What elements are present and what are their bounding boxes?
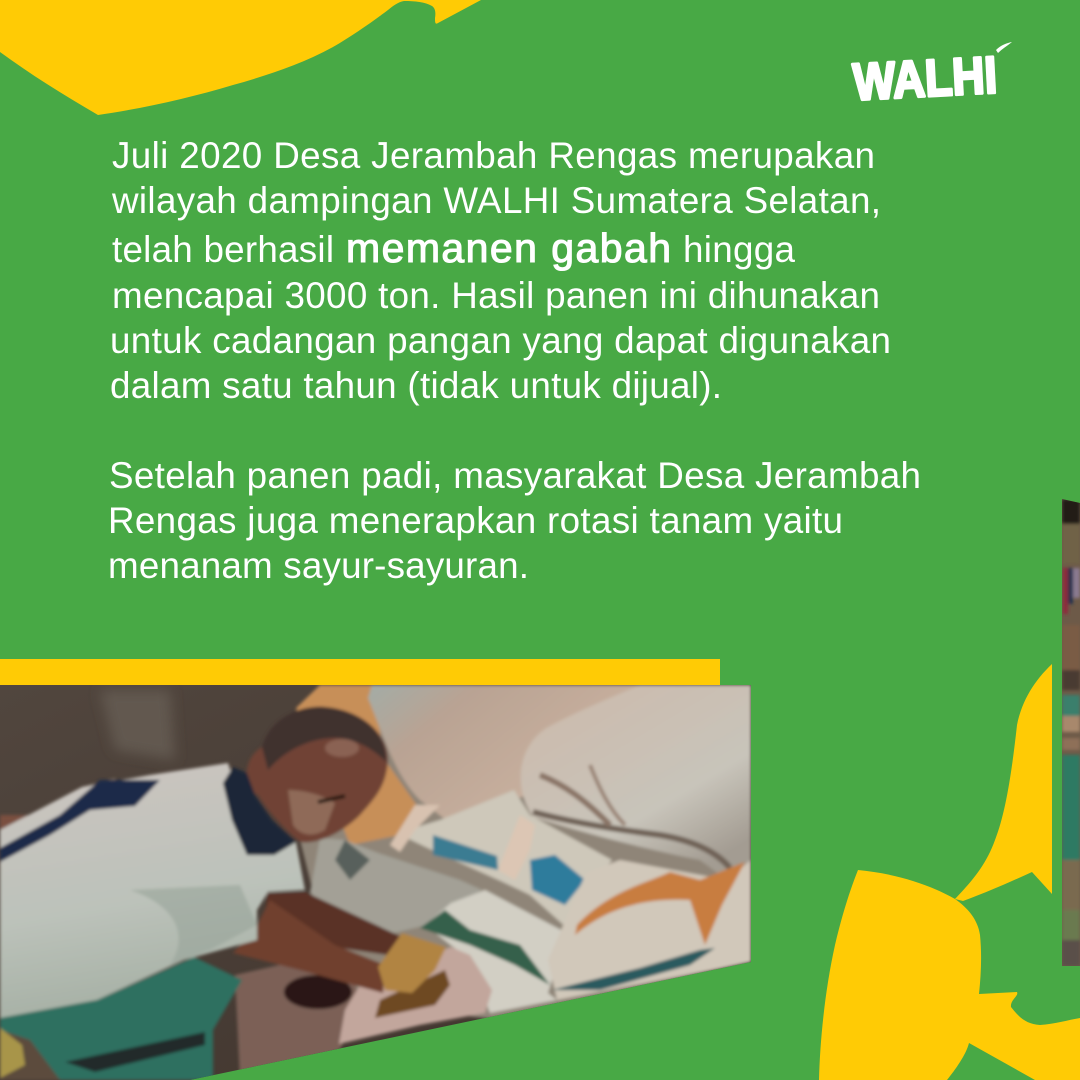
blue print xyxy=(433,835,498,870)
sack base xyxy=(300,685,751,1020)
text block: first paragraph xyxy=(110,135,891,406)
forearm lower xyxy=(233,900,385,993)
dark pot xyxy=(284,975,352,1009)
decorative yellow shape: right leaf xyxy=(955,664,1052,901)
trousers xyxy=(0,957,242,1080)
text block: first paragraph: telah berhasil xyxy=(112,229,334,270)
rear left fabric xyxy=(0,814,28,830)
grain in hand xyxy=(378,933,446,993)
logo accent xyxy=(996,42,1012,53)
forearm upper xyxy=(265,892,402,955)
shirt shadow xyxy=(130,885,257,965)
right lower orange sack xyxy=(548,860,751,1000)
cheek xyxy=(288,790,335,835)
top sack xyxy=(368,685,640,820)
green pattern sack xyxy=(425,890,567,1013)
collar xyxy=(223,767,296,855)
hair xyxy=(262,707,386,770)
left lower sack xyxy=(310,838,482,935)
eye xyxy=(318,796,345,802)
text block: first paragraph: mencapai 3000 ton. Hasil panen ini dihunakan xyxy=(112,275,880,316)
logo: WALHI: WALHI xyxy=(852,47,998,112)
shirt lettering xyxy=(0,780,160,862)
text block: first paragraph: Juli 2020 Desa Jerambah Rengas merupakan xyxy=(112,135,875,176)
text block: second paragraph: Rengas juga menerapkan rotasi tanam yaitu xyxy=(108,500,843,541)
shirt xyxy=(0,763,305,1018)
open grain sack xyxy=(339,947,492,1044)
decorative yellow shape: top left xyxy=(0,0,481,115)
text block: first paragraph: wilayah dampingan WALHI Sumatera Selatan, xyxy=(111,180,881,221)
clutter bottom left xyxy=(0,1030,60,1080)
text block: first paragraph: hingga xyxy=(683,229,796,270)
text block: first paragraph: untuk cadangan pangan yang dapat digunakan xyxy=(110,320,891,361)
rear orange sack xyxy=(296,685,420,845)
decorative yellow shape: bottom right xyxy=(819,870,1080,1080)
yellow bar above photo xyxy=(0,659,720,685)
floor xyxy=(235,950,360,1080)
text block: second paragraph: menanam sayur-sayuran. xyxy=(108,545,529,586)
photo: farmer with rice sacks xyxy=(0,685,751,1080)
wall highlight xyxy=(100,690,175,760)
text block: first paragraph: memanen gabah xyxy=(346,225,671,271)
forehead light xyxy=(325,739,359,757)
head xyxy=(244,726,390,844)
sack stitching xyxy=(533,812,730,868)
middle printed sack xyxy=(397,790,612,928)
leaf pattern on sack xyxy=(335,840,370,880)
text block: second paragraph: Setelah panen padi, masyarakat Desa Jerambah xyxy=(109,455,921,496)
sack tie xyxy=(390,805,440,852)
text block: first paragraph: dalam satu tahun (tidak untuk dijual). xyxy=(110,365,722,406)
photo: village strip right xyxy=(1062,499,1080,966)
right upper sack xyxy=(521,685,751,880)
text block: second paragraph xyxy=(108,455,921,586)
